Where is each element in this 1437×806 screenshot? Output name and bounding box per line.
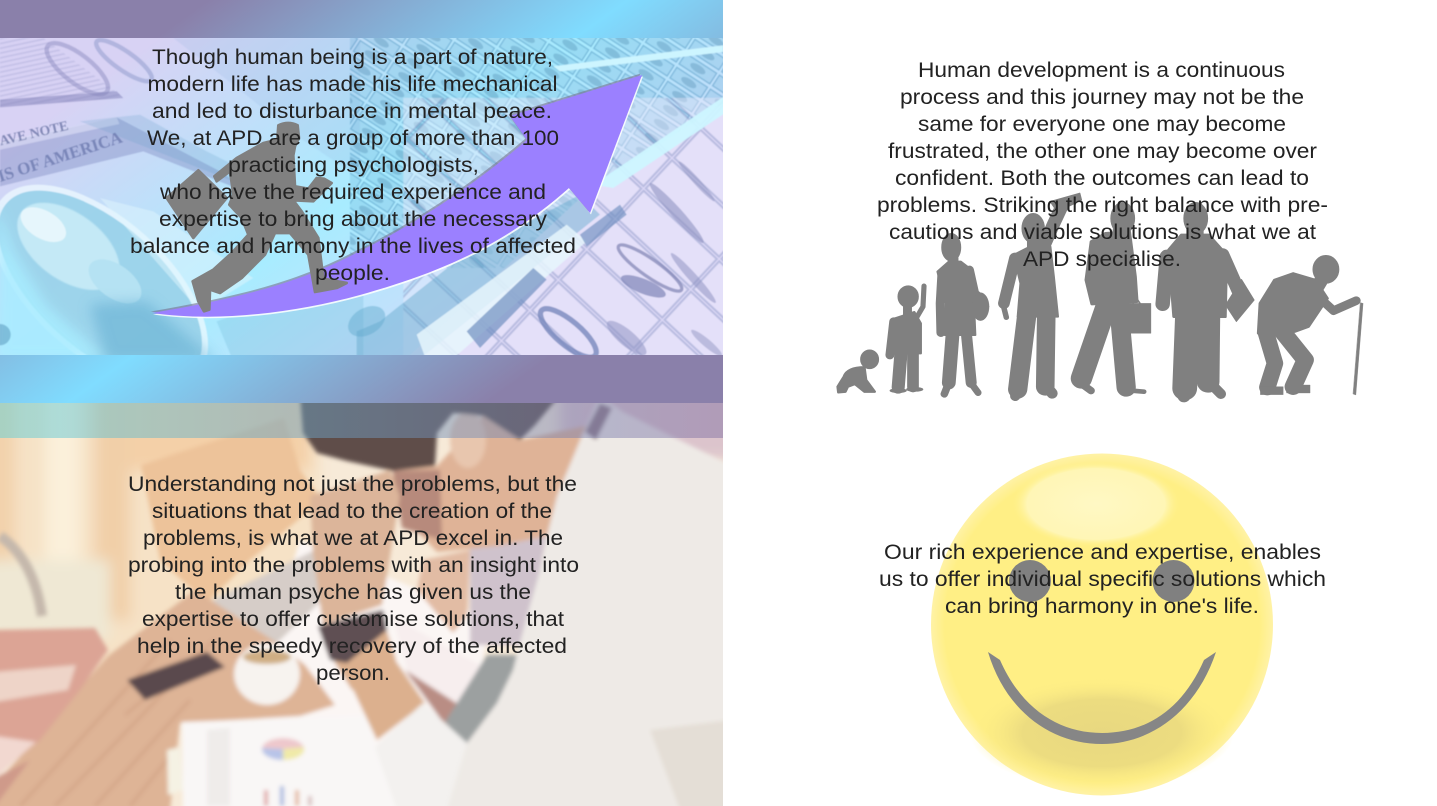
elbow (417, 550, 470, 633)
boy with ball (937, 233, 989, 394)
cup (234, 643, 300, 705)
panel: human development (838, 58, 1363, 396)
text block: mental peace: modern life has made his life mechanical (148, 72, 558, 96)
text block: mental peace: practicing psychologists, (228, 153, 479, 177)
text block: mental peace: expertise to bring about the necessary (159, 207, 547, 231)
text block: human development: frustrated, the other one may become over (888, 139, 1317, 163)
shirt (447, 395, 730, 806)
book and pages (393, 617, 485, 720)
text block: mental peace: people. (315, 261, 390, 285)
curtain and room (0, 403, 723, 662)
text block: understanding problems: Understanding not just the problems, but the (128, 472, 577, 496)
text block: understanding problems: situations that lead to the creation of the (152, 499, 552, 523)
text block: understanding problems: the human psyche has given us the (175, 580, 531, 604)
icon: rising purple arrow (150, 74, 643, 318)
photo wash at top (0, 403, 723, 438)
panel: mental peace (money and arrow) (0, 0, 727, 425)
icon: running businessman silhouette (167, 123, 347, 311)
laptop (140, 438, 318, 600)
text block: human development: process and this journey may not be the (900, 85, 1304, 109)
sofa (0, 626, 110, 744)
forearm and hand (310, 470, 400, 625)
phone (127, 652, 225, 700)
young man raising arm (1003, 193, 1081, 396)
text block: understanding problems (128, 472, 579, 685)
text block: understanding problems: probing into the problems with an insight into (128, 553, 579, 577)
text block: understanding problems: help in the speedy recovery of the affected (137, 634, 567, 658)
heavy man (1163, 202, 1254, 396)
text block: harmony: can bring harmony in one's life. (945, 594, 1259, 618)
text block: human development: cautions and viable solutions is what we at (889, 220, 1316, 244)
text block: understanding problems: problems, is what we at APD excel in. The (143, 526, 563, 550)
text block: mental peace: who have the required experience and (159, 180, 546, 204)
text block: human development (877, 58, 1328, 271)
portrait (0, 184, 208, 355)
panel: harmony smiley (879, 454, 1326, 796)
text block: harmony (879, 540, 1326, 618)
gradient band behind photo (0, 0, 723, 403)
panel: understanding problems (stressed man photo) (0, 390, 740, 806)
man with briefcase (1077, 202, 1151, 392)
baby (838, 351, 878, 392)
text block: human development: confident. Both the outcomes can lead to (895, 166, 1309, 190)
child (890, 286, 924, 393)
text block: mental peace (130, 45, 576, 285)
text block: mental peace: We, at APD are a group of more than 100 (147, 126, 559, 150)
text block: mental peace: balance and harmony in the lives of affected (130, 234, 576, 258)
stressed man photo (0, 390, 740, 806)
lilac shadow (470, 528, 548, 645)
old man with cane (1258, 255, 1363, 395)
text block: understanding problems: person. (316, 661, 390, 685)
face and neck (393, 416, 590, 552)
banknote photo: AVE NOTE (0, 118, 70, 148)
text block: human development: Human development is a continuous (918, 58, 1285, 82)
text block: mental peace: Though human being is a part of nature, (152, 45, 553, 69)
desk (0, 590, 335, 806)
text block: human development: same for everyone one may become (918, 112, 1286, 136)
icon: smiley face (931, 454, 1273, 796)
text block: harmony: us to offer individual specific solutions which (879, 567, 1326, 591)
text block: mental peace: and led to disturbance in mental peace. (152, 99, 552, 123)
text block: understanding problems: expertise to offer customise solutions, that (142, 607, 564, 631)
banknote photo (0, 38, 723, 355)
watch (318, 610, 387, 663)
report paper (182, 715, 400, 806)
text block: harmony: Our rich experience and expertise, enables (884, 540, 1321, 564)
text block: human development: problems. Striking the right balance with pre- (877, 193, 1328, 217)
text block: human development: APD specialise. (1023, 247, 1181, 271)
hair (300, 395, 560, 471)
icon: life stages silhouettes (838, 193, 1363, 396)
sleeve (387, 702, 468, 806)
